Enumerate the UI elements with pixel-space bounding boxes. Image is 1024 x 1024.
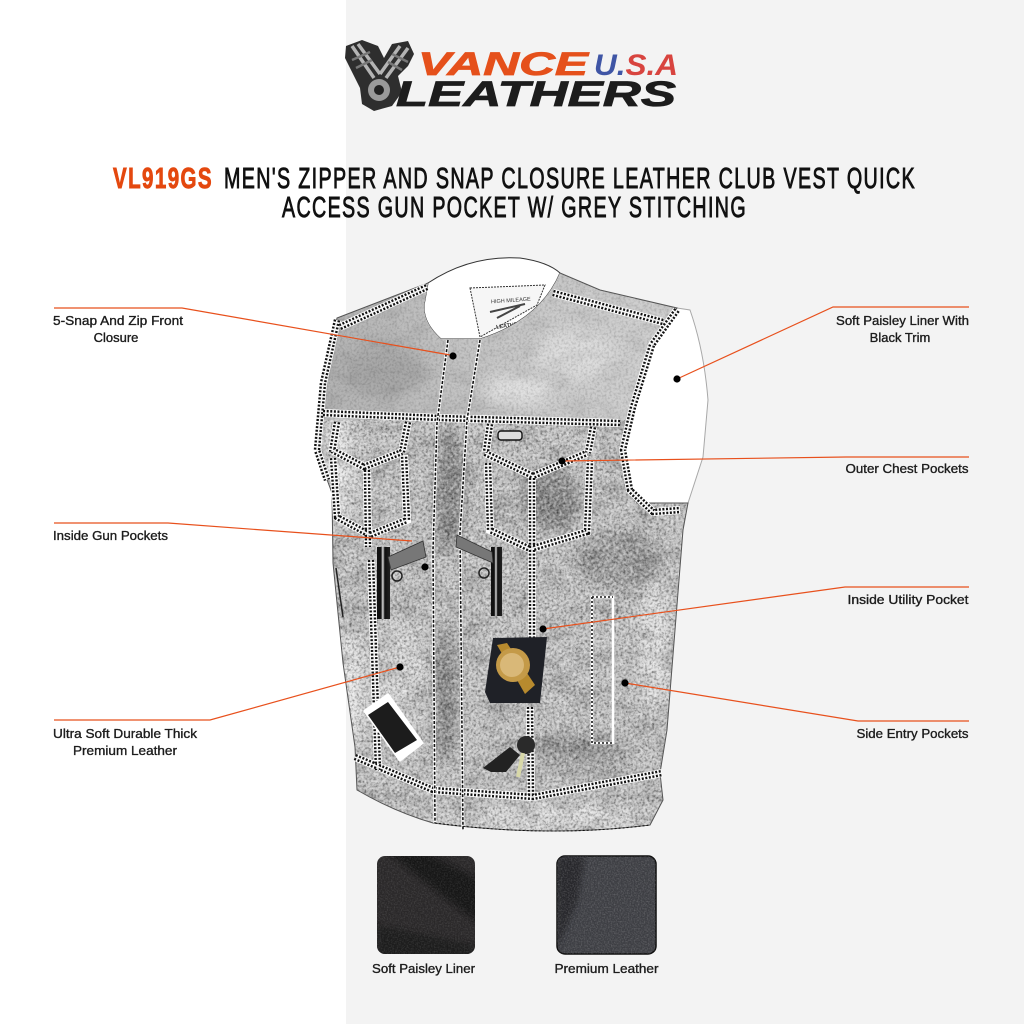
swatch: soft paisley liner [372,850,480,976]
callout: 5-snap and zip front closure: 5-Snap And Zip Front [53,313,183,328]
logo wordmark: LEATHERS: LEATHERS [396,75,676,114]
icon: car key [483,736,535,777]
vest: collar opening [424,258,560,339]
callout: 5-snap and zip front closure [53,308,457,360]
callout: inside gun pockets: Inside Gun Pockets [53,528,169,543]
icon: v-twin engine [345,40,414,111]
callout: 5-snap and zip front closure: Closure [94,330,138,345]
callout: ultra soft leather: Ultra Soft Durable Thick [53,726,198,741]
vest: outline [316,273,688,831]
callout: inside gun pockets [53,523,429,571]
callout: soft paisley liner: Soft Paisley Liner With [836,313,969,328]
icon: right pistol [456,535,502,616]
icon: utility pouch [485,637,547,703]
swatch: premium leather: Premium Leather [554,961,659,976]
swatch: premium leather [554,856,659,976]
icon: gold watch [496,643,535,694]
title: VL919GS [113,163,213,195]
title: ACCESS GUN POCKET W/ GREY STITCHING [282,192,747,224]
swatch: soft paisley liner: Soft Paisley Liner [372,961,476,976]
callout: soft paisley liner [673,307,969,383]
vest: stitched seams [317,287,680,797]
vest: neck tag: HIGH MILEAGE [491,297,531,305]
vest: leather body [310,270,695,845]
vest: paisley liner [620,308,708,510]
callout: side entry pockets [621,679,969,741]
logo [345,40,678,114]
callout: side entry pockets: Side Entry Pockets [856,726,969,741]
vest [310,258,708,845]
title [113,163,916,224]
vest: zip placket [433,340,650,831]
icon: left pistol [377,541,426,619]
callout: ultra soft leather [53,663,404,758]
callout: inside utility pocket [539,587,969,633]
logo wordmark: VANCE: VANCE [418,46,591,82]
callout: inside utility pocket: Inside Utility Pocket [848,592,969,607]
callout: ultra soft leather: Premium Leather [73,743,178,758]
logo wordmark: U.S.A: U.S.A [594,49,678,82]
icon: smartphone [365,695,422,760]
vest: neck tag [470,285,545,337]
vest: chest badge [498,431,522,440]
vest: neck tag: LEATHER [496,321,522,331]
vest: side entry pocket [336,568,613,743]
callout: outer chest pockets: Outer Chest Pockets [846,461,969,476]
callout: soft paisley liner: Black Trim [870,330,930,345]
callout: outer chest pockets [558,457,969,476]
